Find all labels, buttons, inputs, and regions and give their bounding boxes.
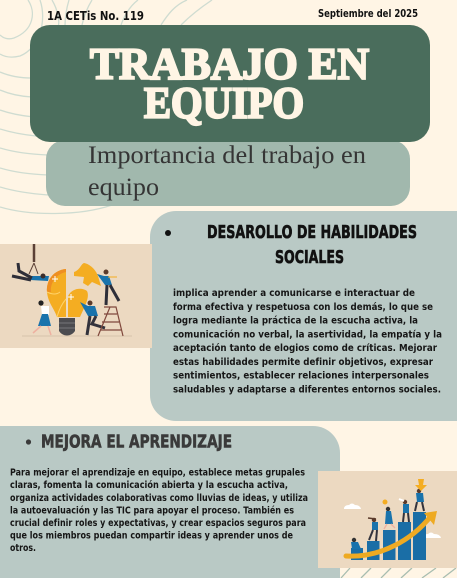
panel: title (30, 25, 430, 142)
panel: desarrollo de habilidades sociales (150, 211, 457, 421)
clouds (344, 504, 441, 538)
figure: hanging person (12, 244, 49, 281)
heading: MEJORA EL APRENDIZAJE (41, 432, 232, 452)
title text: EQUIPO (144, 78, 304, 128)
body text: crucial definir roles y expectativas, y crear espacios seguros para (10, 518, 306, 529)
arrow (346, 511, 437, 556)
body text: implica aprender a comunicarse e interactuar de (173, 288, 415, 299)
date header: school group: 1A CETis No. 119 (47, 8, 144, 23)
body text: organiza actividades colaborativas como lluvias de ideas, y utiliza (10, 493, 308, 504)
bar chart (351, 512, 426, 560)
subtitle text: equipo (88, 174, 159, 201)
illustration: team assembling a puzzle light bulb (0, 244, 152, 348)
body text: la autoevaluación y las TIC para apoyar el proceso. También es (10, 504, 294, 516)
ground line (22, 335, 132, 337)
figures on bars (351, 479, 427, 549)
figure: woman pushing (33, 300, 51, 335)
body text: que los miembros puedan compartir ideas y aprender unos de (10, 530, 293, 542)
illustration: team climbing bars with rising arrow (318, 471, 457, 568)
date header: date: Septiembre del 2025 (318, 9, 418, 20)
bullet (26, 439, 31, 445)
subtitle text: Importancia del trabajo en (88, 142, 367, 169)
body text: otros. (10, 543, 36, 554)
figure: man pushing (80, 300, 105, 335)
icon: light bulb (47, 263, 101, 336)
figure: man on ladder (97, 270, 123, 336)
panel: subtitle (46, 140, 410, 206)
heading: SOCIALES (275, 248, 344, 268)
body text: Para mejorar el aprendizaje en equipo, establece metas grupales (10, 468, 305, 478)
body text: logra mediante la práctica de la escucha activa, la (173, 314, 418, 326)
bullet (165, 230, 171, 236)
body text: claras, fomenta la comunicación abierta y la escucha activa, (10, 479, 288, 491)
sparkles (52, 276, 74, 300)
panel: mejora el aprendizaje (0, 426, 340, 578)
title text: TRABAJO EN (90, 40, 369, 88)
